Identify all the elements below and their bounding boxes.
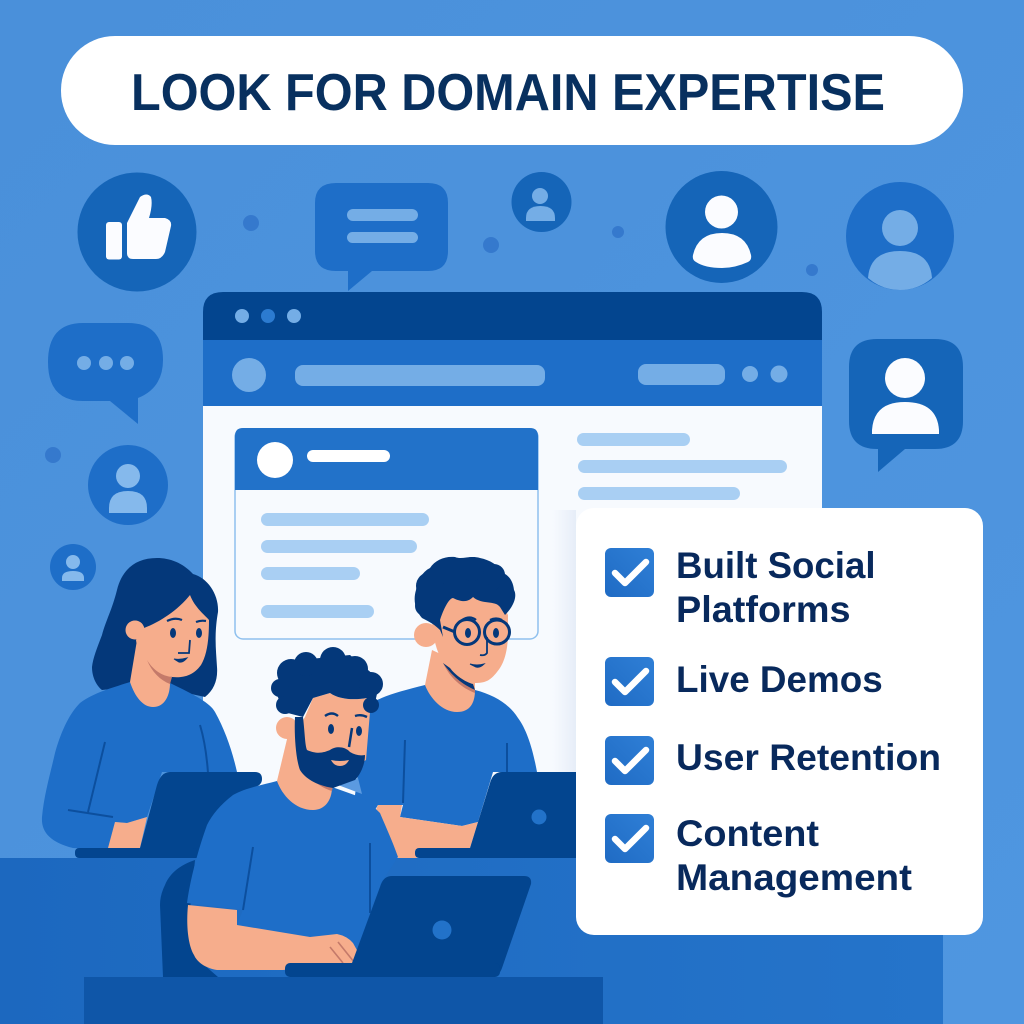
item: built social platforms xyxy=(605,545,876,630)
item: built social platforms: Built Social xyxy=(676,545,876,586)
person: bearded man xyxy=(160,647,531,977)
item: content management: Management xyxy=(676,857,912,898)
desk back xyxy=(0,858,943,1024)
icon: typing bubble xyxy=(48,323,163,424)
icon: small user left xyxy=(50,544,96,590)
item: live demos: Live Demos xyxy=(676,659,883,700)
item: content management xyxy=(605,813,912,898)
icon: large user xyxy=(666,171,778,283)
item: built social platforms: Platforms xyxy=(676,589,850,630)
title banner: LOOK FOR DOMAIN EXPERTISE xyxy=(131,64,885,122)
icon: user left xyxy=(88,445,168,525)
decorative dots xyxy=(45,215,818,463)
icon: small user top xyxy=(512,172,572,232)
person: man with glasses xyxy=(355,557,580,858)
icon: thumbs up xyxy=(78,172,196,292)
item: user retention xyxy=(605,736,941,785)
profile card xyxy=(235,428,538,639)
desk front xyxy=(84,977,603,1024)
side text lines xyxy=(577,433,787,500)
person: woman xyxy=(42,558,262,858)
browser nav bar xyxy=(203,340,822,406)
item: content management: Content xyxy=(676,813,819,854)
title banner xyxy=(61,36,963,145)
checklist panel xyxy=(576,508,983,935)
browser window xyxy=(203,292,822,870)
icon: user chat bubble xyxy=(849,339,963,472)
item: user retention: User Retention xyxy=(676,737,941,778)
icon: message bubble xyxy=(315,183,448,291)
item: live demos xyxy=(605,657,883,706)
browser title bar xyxy=(203,292,822,342)
icon: faded user xyxy=(846,182,954,290)
